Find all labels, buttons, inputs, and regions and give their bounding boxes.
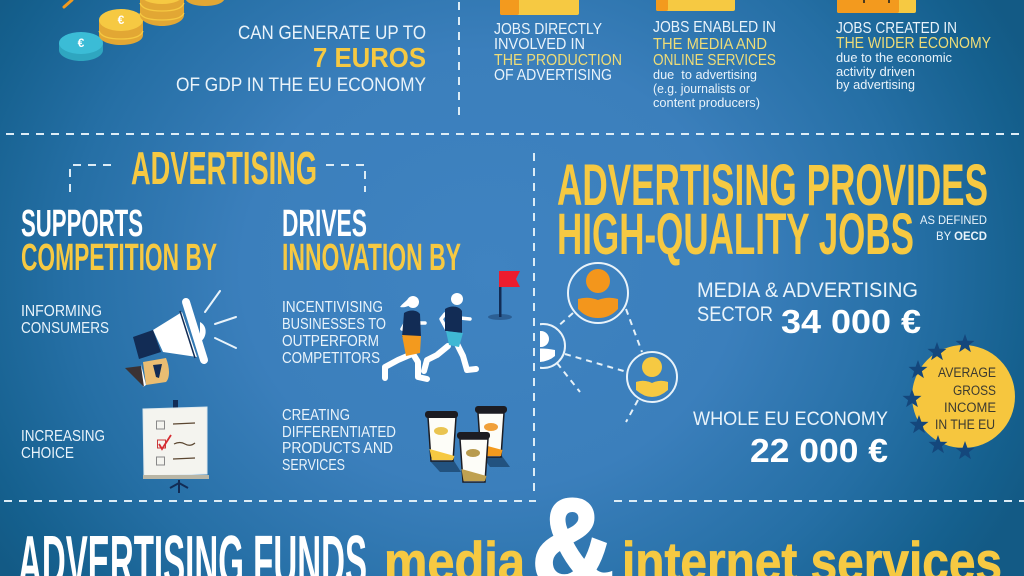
text: 7 euros of GDP: OF GDP IN THE EU ECONOMY: [176, 75, 426, 96]
stat: whole EU economy salary: [693, 409, 888, 469]
column: enabled jobs: due to advertising: [653, 68, 757, 82]
heading: supports competition: COMPETITION BY: [21, 237, 217, 279]
heading: advertising: ADVERTISING: [131, 142, 317, 194]
column: direct jobs: JOBS DIRECTLY: [494, 21, 602, 38]
column: wider economy jobs: by advertising: [836, 78, 915, 92]
column: wider economy jobs: JOBS CREATED IN: [836, 20, 957, 37]
heading: drives innovation: [282, 203, 461, 279]
text: increasing choice: INCREASING: [21, 428, 105, 445]
text: as defined by OECD: AS DEFINED: [920, 213, 987, 227]
text: increasing choice: [21, 428, 105, 462]
heading: high-quality jobs: [557, 153, 988, 267]
badge: average gross income: [902, 334, 1015, 459]
stat: media and advertising salary: SECTOR: [697, 303, 773, 326]
stat: media and advertising salary: [697, 279, 921, 340]
icon: euro coin stacks: €: [78, 36, 85, 50]
text: incentivising businesses: OUTPERFORM: [282, 333, 379, 350]
text: informing consumers: [21, 303, 109, 337]
column: enabled jobs: (e.g. journalists or: [653, 82, 750, 96]
stat: media and advertising salary: MEDIA & ADVERTISING: [697, 279, 918, 302]
text: incentivising businesses: INCENTIVISING: [282, 299, 383, 316]
badge: average gross income: AVERAGE: [938, 365, 996, 380]
column: enabled jobs: [653, 0, 776, 110]
column: direct jobs: THE PRODUCTION: [494, 52, 622, 69]
column: wider economy jobs: [836, 0, 991, 92]
text: incentivising businesses: COMPETITORS: [282, 350, 380, 367]
icon: euro coin stacks: €: [118, 13, 125, 27]
stat: media and advertising salary: 34 000 €: [781, 303, 921, 340]
heading: drives innovation: INNOVATION BY: [282, 237, 461, 279]
badge: average gross income: IN THE EU: [935, 417, 995, 432]
text: creating differentiated products: DIFFERENTIATED: [282, 424, 396, 441]
text: informing consumers: INFORMING: [21, 303, 102, 320]
stat: whole EU economy salary: 22 000 €: [750, 432, 888, 469]
icon: megaphone in hand: [125, 291, 236, 387]
column: enabled jobs: content producers): [653, 96, 760, 110]
text: incentivising businesses: BUSINESSES TO: [282, 316, 386, 333]
column: direct jobs: [494, 0, 622, 84]
column: wider economy jobs: due to the economic: [836, 51, 952, 65]
icon: two runners and flag: [385, 271, 520, 379]
column: enabled jobs: THE MEDIA AND: [653, 36, 767, 53]
text: increasing choice: CHOICE: [21, 445, 74, 462]
diagram: people network: [540, 262, 678, 422]
text: informing consumers: CONSUMERS: [21, 320, 109, 337]
text: as defined by OECD: [920, 213, 987, 243]
column: direct jobs: INVOLVED IN: [494, 36, 585, 53]
stat: whole EU economy salary: WHOLE EU ECONOMY: [693, 409, 888, 430]
heading: drives innovation: DRIVES: [282, 203, 367, 245]
badge: average gross income: INCOME: [944, 400, 996, 415]
column: enabled jobs: ONLINE SERVICES: [653, 52, 776, 69]
text: 7 euros of GDP: 7 EUROS: [313, 42, 426, 73]
heading: supports competition: [21, 203, 217, 279]
badge: average gross income: GROSS: [953, 383, 996, 398]
column: wider economy jobs: THE WIDER ECONOMY: [836, 35, 991, 52]
icon: coffee cups: [425, 406, 510, 482]
text: incentivising businesses: [282, 299, 386, 367]
heading: advertising: [70, 142, 365, 194]
text: 7 euros of GDP: CAN GENERATE UP TO: [238, 23, 426, 44]
text: creating differentiated products: CREATING: [282, 407, 350, 424]
text: creating differentiated products: [282, 407, 396, 474]
column: enabled jobs: JOBS ENABLED IN: [653, 19, 776, 36]
heading: supports competition: SUPPORTS: [21, 203, 143, 245]
column: wider economy jobs: activity driven: [836, 65, 915, 79]
icon: checklist board: [143, 400, 209, 493]
column: direct jobs: OF ADVERTISING: [494, 67, 612, 84]
icon: euro coin stacks: [59, 0, 225, 61]
text: creating differentiated products: PRODUCTS AND: [282, 440, 393, 457]
text: as defined by OECD: BY OECD: [936, 229, 987, 243]
text: creating differentiated products: SERVICES: [282, 457, 345, 474]
text: 7 euros of GDP: [176, 23, 426, 96]
